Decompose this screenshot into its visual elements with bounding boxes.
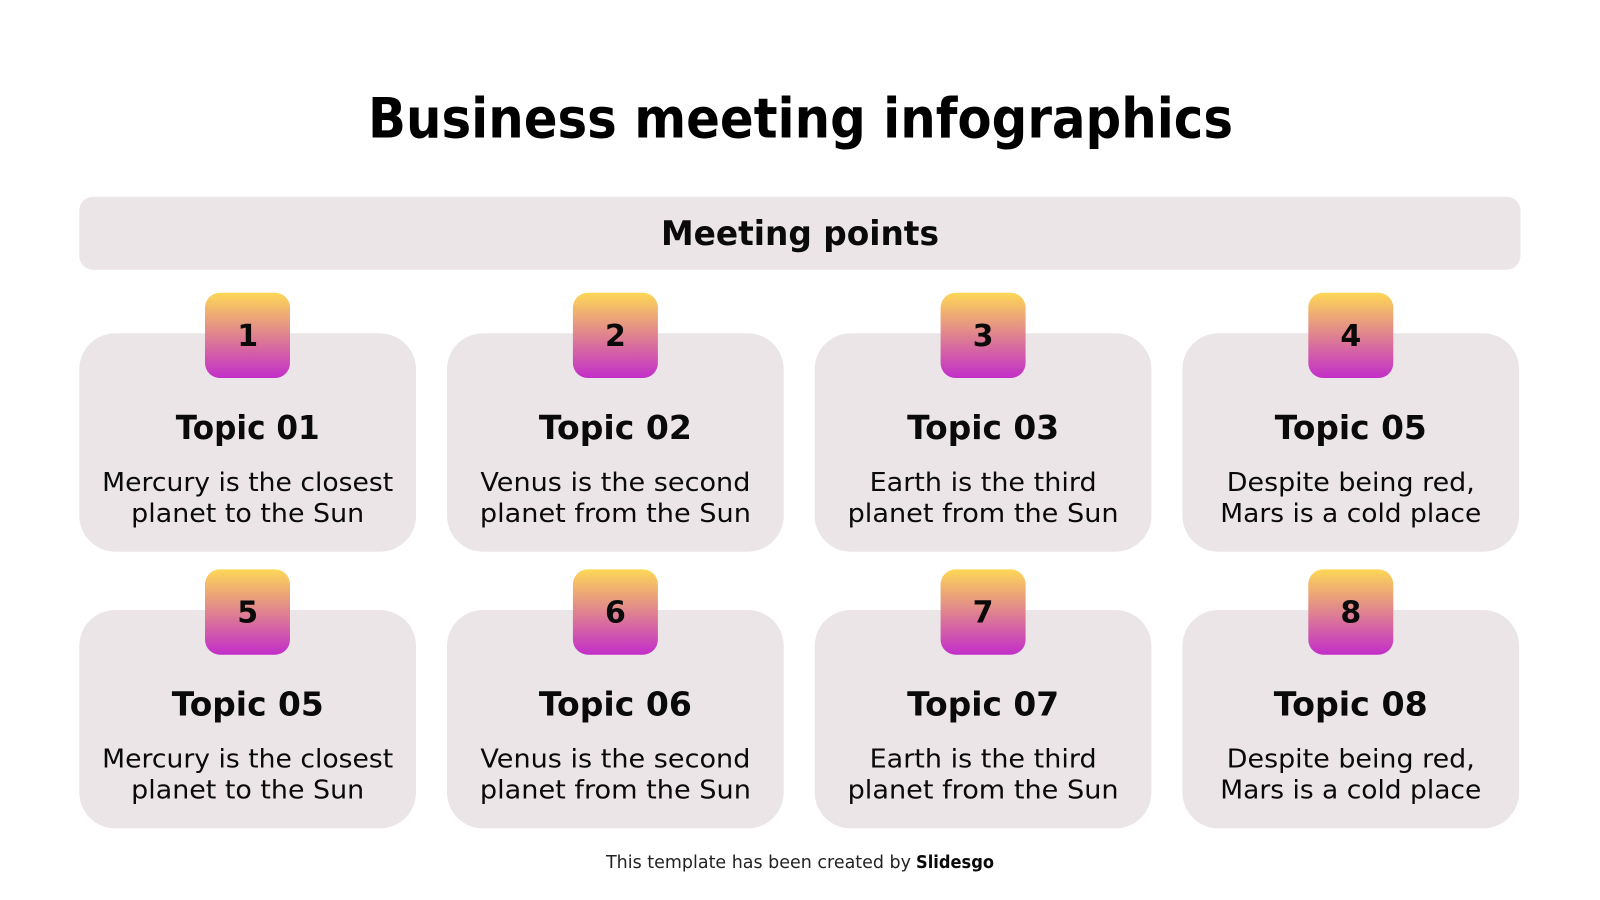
number badge 2: 2 xyxy=(605,319,626,354)
topic description: Mercury is the closest xyxy=(102,468,393,498)
topic description: Mars is a cold place xyxy=(1220,499,1481,529)
number badge 4 xyxy=(1308,293,1393,378)
number badge 7: 7 xyxy=(973,596,994,631)
number badge 3: 3 xyxy=(973,319,994,354)
number badge 1: 1 xyxy=(237,319,258,354)
panel: topic card 2 xyxy=(447,293,784,552)
card background xyxy=(447,333,784,552)
topic description: Mercury is the closest xyxy=(102,745,393,775)
topic description: Venus is the second xyxy=(480,468,750,498)
topic description: planet from the Sun xyxy=(848,776,1119,806)
number badge 3 xyxy=(941,293,1026,378)
topic description: planet to the Sun xyxy=(131,499,364,529)
topic heading: Topic 06 xyxy=(539,685,692,724)
number badge 1 xyxy=(205,293,290,378)
number badge 4: 4 xyxy=(1340,319,1361,354)
panel: topic card 6 xyxy=(447,569,784,828)
card background xyxy=(79,610,416,828)
panel: meeting points header xyxy=(79,197,1520,270)
topic description: Mars is a cold place xyxy=(1220,776,1481,806)
header label: Meeting points xyxy=(661,214,939,254)
topic heading: Topic 07 xyxy=(907,685,1059,724)
panel: topic card 1 xyxy=(79,293,416,552)
topic description: planet from the Sun xyxy=(848,499,1119,529)
number badge 8 xyxy=(1308,569,1393,655)
panel: topic card 7 xyxy=(815,569,1151,828)
card background xyxy=(1182,610,1519,828)
topic description: Venus is the second xyxy=(480,745,750,775)
number badge 5: 5 xyxy=(237,596,258,631)
number badge 8: 8 xyxy=(1340,596,1361,631)
topic description: Earth is the third xyxy=(870,468,1097,498)
topic description: Despite being red, xyxy=(1227,468,1475,498)
topic description xyxy=(848,745,1119,806)
topic heading: Topic 02 xyxy=(539,408,692,447)
footer credit: Slidesgo xyxy=(916,853,994,873)
topic description: Earth is the third xyxy=(870,745,1097,775)
card background xyxy=(1182,333,1519,552)
header background xyxy=(79,197,1520,270)
topic heading: Topic 05 xyxy=(1275,408,1427,447)
footer credit: This template has been created by xyxy=(605,853,911,873)
topic heading: Topic 05 xyxy=(172,685,324,724)
number badge 6 xyxy=(573,569,658,655)
topic description xyxy=(102,745,393,806)
number badge 2 xyxy=(573,293,658,378)
card background xyxy=(815,610,1151,828)
topic description xyxy=(1220,745,1481,806)
topic description xyxy=(1220,468,1481,529)
topic heading: Topic 01 xyxy=(176,408,320,447)
topic description: planet from the Sun xyxy=(480,776,751,806)
topic description xyxy=(102,468,393,529)
panel: topic card 3 xyxy=(815,293,1151,552)
panel: topic card 4 xyxy=(1182,293,1519,552)
topic description: planet to the Sun xyxy=(131,776,364,806)
topic description: Despite being red, xyxy=(1227,745,1475,775)
topic description xyxy=(480,745,751,806)
card background xyxy=(79,333,416,552)
topic heading: Topic 08 xyxy=(1274,685,1428,724)
topic description xyxy=(848,468,1119,529)
card background xyxy=(815,333,1151,552)
topic description: planet from the Sun xyxy=(480,499,751,529)
title: Business meeting infographics xyxy=(368,86,1233,150)
card background xyxy=(447,610,784,828)
topic description xyxy=(480,468,751,529)
number badge 5 xyxy=(205,569,290,655)
topic heading: Topic 03 xyxy=(907,408,1059,447)
panel: topic card 8 xyxy=(1182,569,1519,828)
panel: topic card 5 xyxy=(79,569,416,828)
number badge 6: 6 xyxy=(605,596,626,631)
number badge 7 xyxy=(941,569,1026,655)
